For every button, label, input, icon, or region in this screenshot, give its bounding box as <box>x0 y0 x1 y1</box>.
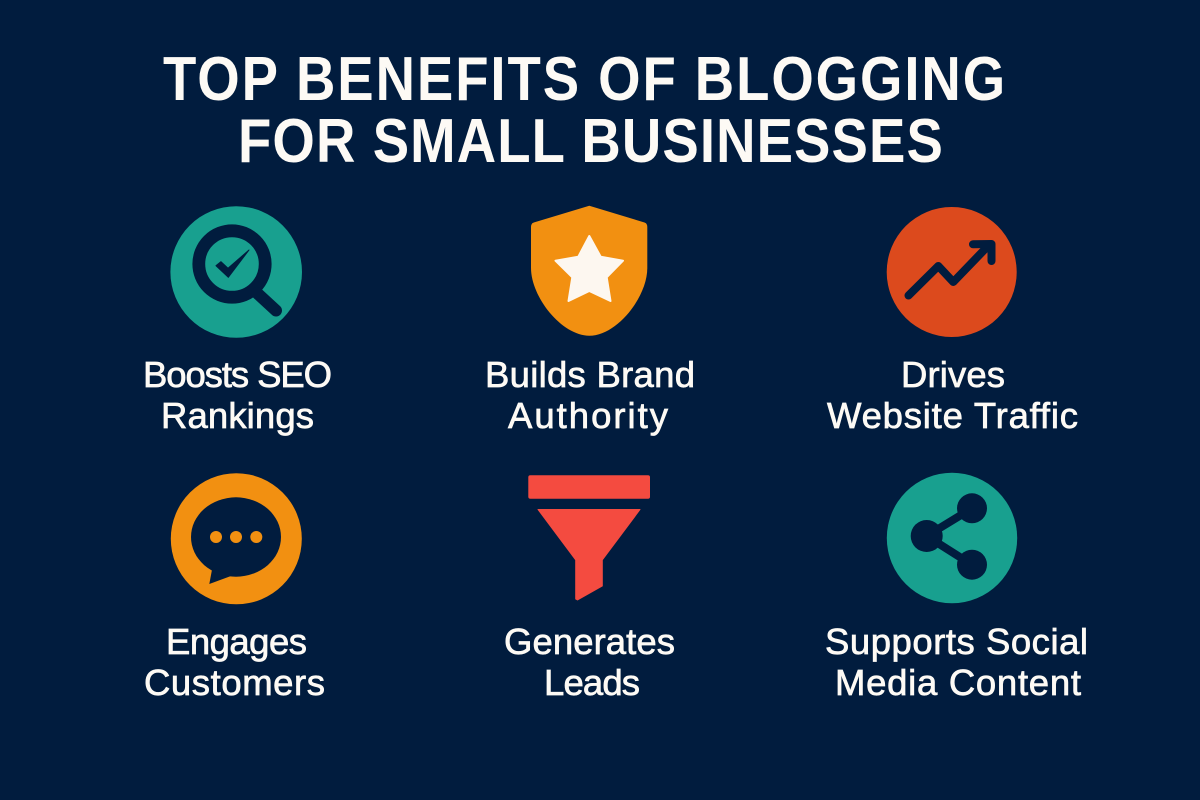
title: FOR SMALL BUSINESSES <box>238 107 943 176</box>
title: TOP BENEFITS OF BLOGGING <box>163 45 1005 114</box>
label: Generates Leads <box>504 621 675 703</box>
label: Supports Social Media Content: Supports Social <box>825 621 1088 662</box>
label: Generates Leads: Generates <box>504 621 675 662</box>
icon: funnel <box>528 475 650 600</box>
panel: supports social media content <box>825 473 1088 703</box>
panel: builds brand authority <box>485 206 695 436</box>
label: Generates Leads: Leads <box>544 662 640 703</box>
icon: shield with star <box>531 206 647 336</box>
label: Drives Website Traffic: Website Traffic <box>827 395 1078 436</box>
panel: engages customers <box>144 473 325 703</box>
label: Boosts SEO Rankings: Rankings <box>161 395 314 436</box>
label: Builds Brand Authority: Builds Brand <box>485 354 695 395</box>
label: Boosts SEO Rankings <box>143 354 332 436</box>
icon: speech bubble <box>171 473 302 604</box>
panel: generates leads <box>504 475 675 703</box>
label: Supports Social Media Content <box>825 621 1088 703</box>
panel: drives website traffic <box>827 207 1078 436</box>
panel: boosts SEO rankings <box>143 206 332 436</box>
label: Engages Customers: Customers <box>144 662 325 703</box>
label: Builds Brand Authority: Authority <box>508 395 669 436</box>
title <box>163 45 1005 176</box>
label: Supports Social Media Content: Media Content <box>835 662 1081 703</box>
icon: magnifying glass with check <box>170 206 302 338</box>
label: Boosts SEO Rankings: Boosts SEO <box>143 354 332 395</box>
label: Drives Website Traffic: Drives <box>901 354 1005 395</box>
label: Drives Website Traffic <box>827 354 1078 436</box>
label: Builds Brand Authority <box>485 354 695 436</box>
icon: share nodes <box>887 473 1017 603</box>
label: Engages Customers <box>144 621 325 703</box>
icon: rising trend arrow <box>887 207 1017 337</box>
label: Engages Customers: Engages <box>166 621 307 662</box>
